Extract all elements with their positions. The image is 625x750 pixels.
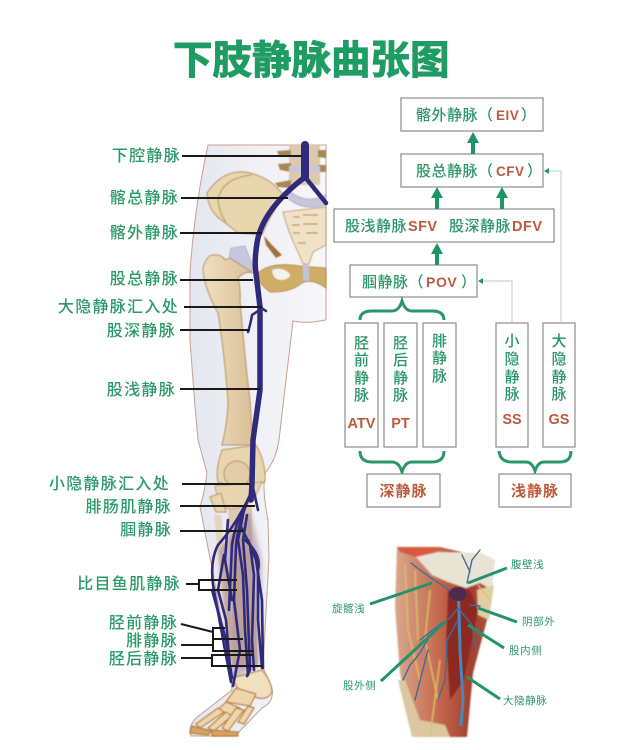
box: great saphenous: 脉 xyxy=(551,386,567,403)
box: SFV and DFV: DFV xyxy=(512,219,542,235)
leg labels: 腘静脉 xyxy=(120,521,172,539)
box: great saphenous: 大 xyxy=(551,333,567,350)
leg labels: 股深静脉 xyxy=(107,322,176,340)
box: superficial veins xyxy=(499,474,571,507)
box: POV: 腘静脉（ xyxy=(362,273,424,291)
box: SFV and DFV: 股深静脉 xyxy=(449,217,511,235)
thigh muscle xyxy=(395,547,495,737)
great saphenous junction and deep femoral vein xyxy=(248,307,266,332)
box: peroneal: 脉 xyxy=(432,368,447,385)
nerves xyxy=(405,565,490,737)
title: 下肢静脉曲张图 xyxy=(173,39,450,83)
foot bones xyxy=(190,670,272,736)
flow chart: vein hierarchy xyxy=(334,98,575,507)
box: SFV and DFV: SFV xyxy=(408,219,437,235)
box: great saphenous: GS xyxy=(549,412,570,428)
brace: top xyxy=(360,301,444,320)
box: anterior tibial: 胫 xyxy=(354,335,369,352)
box: peroneal xyxy=(423,323,456,447)
pointer lines xyxy=(180,156,302,666)
thigh labels xyxy=(332,558,555,707)
leg labels: 腓静脉 xyxy=(126,632,178,650)
box: CFV: ） xyxy=(527,163,543,180)
box: posterior tibial: 胫 xyxy=(393,335,408,352)
saphenous vein tree xyxy=(403,550,480,725)
femur xyxy=(203,255,253,445)
box: anterior tibial: 静 xyxy=(354,369,369,387)
leg skin outline xyxy=(190,145,326,736)
thigh labels: 股内侧 xyxy=(509,644,542,657)
leg labels: 髂外静脉 xyxy=(110,224,179,242)
box: EIV: 髂外静脉（ xyxy=(416,106,494,124)
box: small saphenous: 脉 xyxy=(504,386,520,403)
box: posterior tibial: 脉 xyxy=(393,387,408,404)
veins xyxy=(212,145,326,686)
box: posterior tibial xyxy=(384,323,417,447)
box: EIV: EIV xyxy=(496,108,519,123)
brace: deep xyxy=(360,451,444,472)
knee and lower leg bones xyxy=(210,445,265,680)
thigh pointer lines xyxy=(370,568,517,699)
leg labels: 比目鱼肌静脉 xyxy=(77,575,181,593)
calf muscle shading xyxy=(218,510,262,680)
box: small saphenous: 静 xyxy=(504,368,520,386)
box: superficial veins: 浅静脉 xyxy=(511,482,559,500)
thigh labels: 阴部外 xyxy=(522,615,555,628)
box: CFV xyxy=(401,154,543,187)
box: small saphenous: 小 xyxy=(504,333,520,350)
box: small saphenous: SS xyxy=(502,412,522,428)
thin arrows from superficial veins xyxy=(478,168,561,322)
box: EIV xyxy=(401,98,543,131)
box: peroneal: 腓 xyxy=(432,333,447,350)
leg labels: 下腔静脉 xyxy=(112,147,181,165)
box: EIV: ） xyxy=(521,107,537,124)
arrows up xyxy=(431,132,508,265)
box: great saphenous: 隐 xyxy=(551,351,567,368)
thigh labels: 旋髂浅 xyxy=(332,602,365,615)
box: POV xyxy=(350,265,477,297)
box: POV: ） xyxy=(461,274,477,291)
box: peroneal: 静 xyxy=(432,349,447,367)
box: anterior tibial xyxy=(345,323,378,447)
calf vein network xyxy=(212,483,263,686)
box: anterior tibial: 前 xyxy=(354,352,369,369)
leg labels: 腓肠肌静脉 xyxy=(85,498,172,516)
leg anatomy illustration xyxy=(180,145,326,736)
box: posterior tibial: PT xyxy=(391,416,410,432)
box: CFV: 股总静脉（ xyxy=(416,162,494,180)
box: posterior tibial: 静 xyxy=(393,369,408,387)
leg labels: 大隐静脉汇入处 xyxy=(58,298,179,316)
box: great saphenous xyxy=(543,323,575,447)
box: POV: POV xyxy=(426,274,457,290)
leg labels: 胫后静脉 xyxy=(109,650,178,668)
leg labels: 胫前静脉 xyxy=(109,614,178,632)
thigh labels: 大隐静脉 xyxy=(503,694,547,707)
brace: superficial xyxy=(499,451,571,471)
box: deep veins: 深静脉 xyxy=(379,482,428,500)
box: posterior tibial: 后 xyxy=(393,352,408,369)
leg labels: 股总静脉 xyxy=(110,270,179,288)
box: CFV: CFV xyxy=(496,164,524,179)
leg labels xyxy=(49,147,181,668)
box: great saphenous: 静 xyxy=(551,368,567,386)
iliac and femoral vein xyxy=(301,145,309,177)
box: small saphenous: 隐 xyxy=(504,351,520,368)
box: small saphenous xyxy=(496,323,528,447)
box: anterior tibial: 脉 xyxy=(354,387,369,404)
leg labels: 髂总静脉 xyxy=(110,189,179,207)
box: deep veins xyxy=(367,474,440,507)
thigh labels: 股外侧 xyxy=(343,679,376,692)
thigh dissection illustration xyxy=(332,547,555,737)
box: anterior tibial: ATV xyxy=(348,416,376,432)
thigh labels: 腹壁浅 xyxy=(511,558,544,571)
box: SFV and DFV xyxy=(334,209,554,242)
leg labels: 小隐静脉汇入处 xyxy=(49,475,170,493)
leg labels: 股浅静脉 xyxy=(107,381,176,399)
box: SFV and DFV: 股浅静脉 xyxy=(345,217,407,235)
pelvis bones xyxy=(207,145,326,292)
hip joint xyxy=(229,246,253,272)
